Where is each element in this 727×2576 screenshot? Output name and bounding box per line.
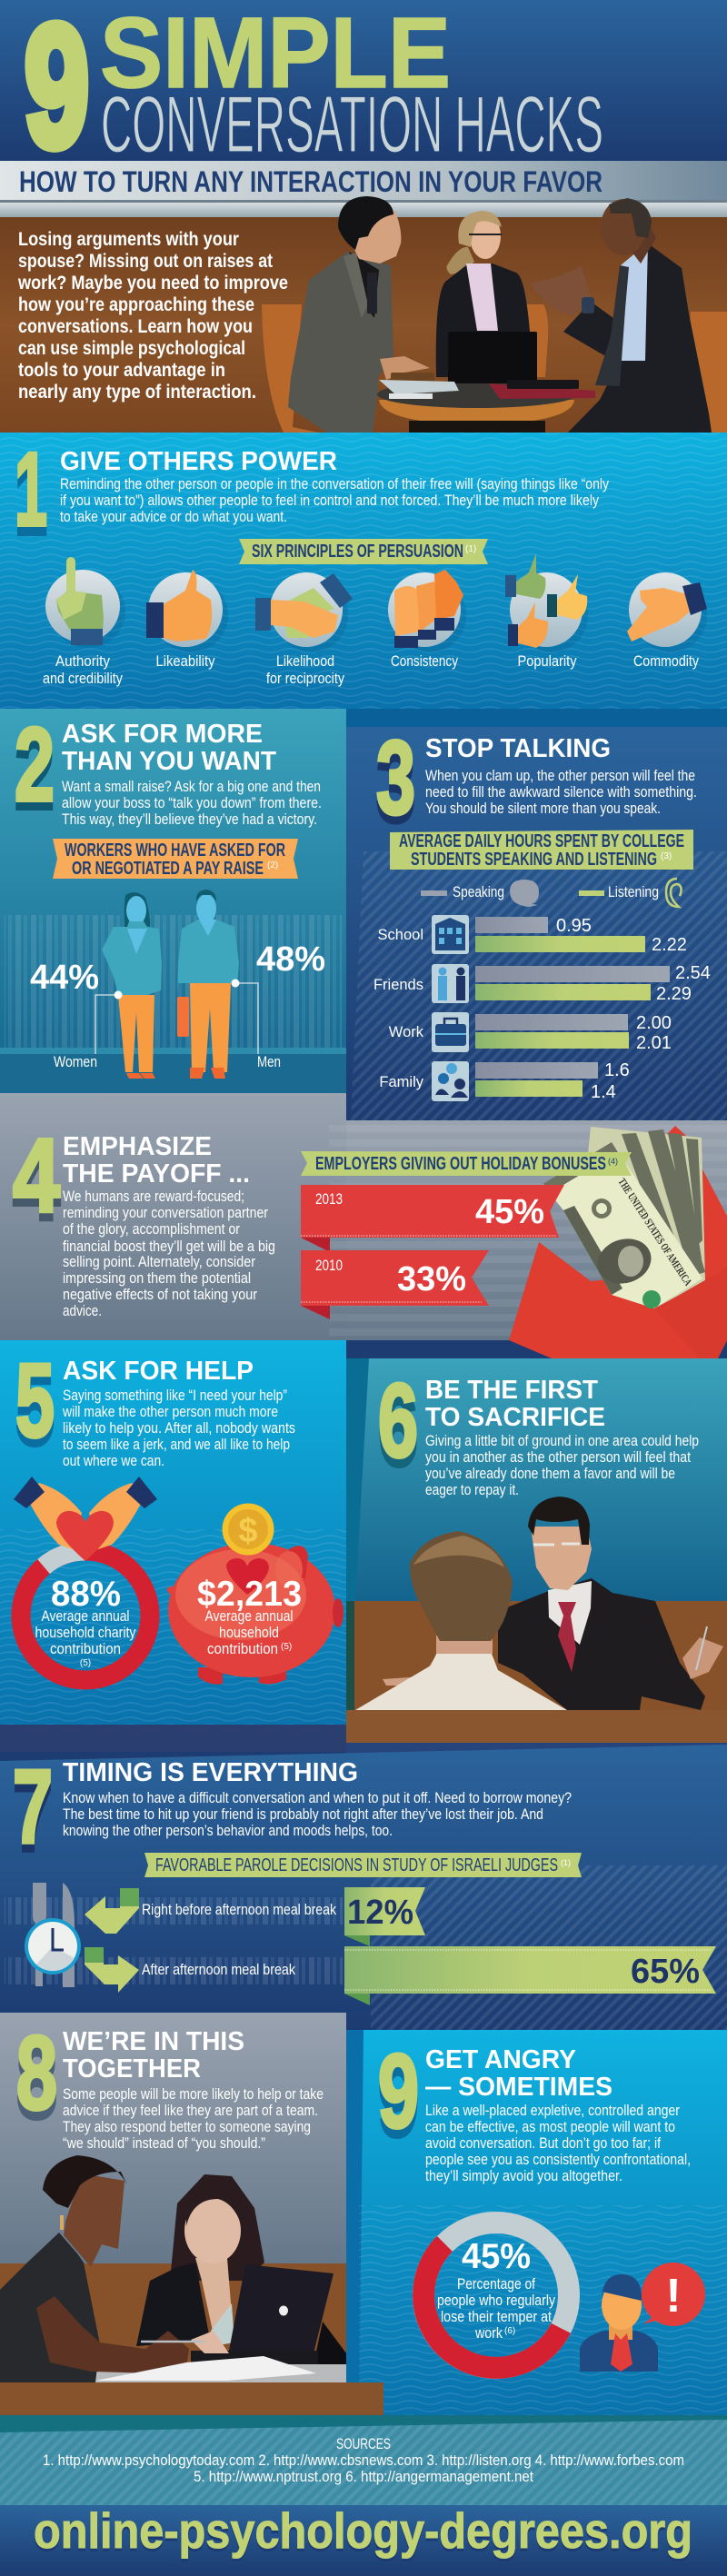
- body: advice.: [63, 1303, 102, 1319]
- subtitle band: [0, 161, 727, 217]
- panel: 6 be the first to sacrifice: TO SACRIFICE: [425, 1403, 605, 1432]
- chart: charity ring: contribution: [50, 1641, 121, 1657]
- body: you in another as the other person will feel that: [425, 1449, 691, 1466]
- body: [62, 779, 322, 828]
- body: likely to help you. After all, nobody wants: [63, 1420, 295, 1437]
- banner: parole decisions: FAVORABLE PAROLE DECISIONS IN STUDY OF ISRAELI JUDGES: [155, 1855, 558, 1875]
- ribbon: 65%: [344, 1946, 716, 2005]
- row: work: Work: [389, 1024, 424, 1040]
- row: work: 2.01: [636, 1033, 672, 1053]
- chart: piggy bank: (5): [281, 1642, 292, 1652]
- intro text: conversations. Learn how you: [18, 316, 253, 337]
- body: [63, 1189, 275, 1319]
- icon: likelihood for reciprocity: [255, 572, 353, 652]
- intro text: can use simple psychological: [18, 338, 245, 359]
- chart: temper ring: 45%: [462, 2237, 531, 2276]
- chairs: [262, 304, 318, 433]
- numeral 5: 5: [15, 1343, 55, 1459]
- ribbon: 2013 45%: 2013: [315, 1190, 343, 1208]
- icon: coin: [222, 1503, 274, 1556]
- body: Saying something like “I need your help”: [63, 1387, 287, 1404]
- chart: temper ring: [423, 2223, 569, 2368]
- labels: Women: [54, 1054, 97, 1070]
- icon: hands with heart: [14, 1477, 157, 1561]
- row: friends: 2.29: [656, 984, 692, 1004]
- legend: [421, 879, 682, 907]
- row: family: 1.4: [591, 1082, 616, 1102]
- body: reminding your conversation partner: [63, 1205, 268, 1221]
- chart: charity ring: household charity: [35, 1625, 136, 1641]
- banner: holiday bonuses: [301, 1151, 632, 1176]
- chart: charity ring: [14, 1477, 157, 1680]
- ribbon: 2013 45%: [301, 1185, 564, 1252]
- arrow: before break: [85, 1888, 139, 1934]
- panel: 5 ask for help: [0, 1340, 346, 1725]
- body: [425, 768, 697, 817]
- panel: 4 emphasize the payoff: THE PAYOFF ...: [63, 1159, 250, 1189]
- panel: 3 stop talking content: [373, 720, 711, 1102]
- stat: women 44%: 44%: [30, 959, 99, 997]
- legend: Listening: [608, 884, 659, 900]
- body: You should be silent more than you speak.: [425, 801, 661, 817]
- body: of the glory, accomplishment or: [63, 1221, 240, 1238]
- intro text: tools to your advantage in: [18, 360, 225, 381]
- row: family: 1.6: [604, 1060, 630, 1080]
- photo: two women with a laptop: [0, 2155, 368, 2382]
- body: “we should” instead of “you should.”: [63, 2135, 265, 2152]
- ribbon: 2010 33%: 33%: [397, 1260, 466, 1298]
- intro panel: [0, 196, 727, 433]
- envelope and money: THE UNITED STATES OF AMERICA: [615, 1176, 695, 1288]
- body: They also respond better to someone saying: [63, 2119, 311, 2135]
- banner: six principles: SIX PRINCIPLES OF PERSUASION: [252, 542, 463, 562]
- body: people see you as consistently confrontational,: [425, 2152, 691, 2168]
- labels: Right before afternoon meal break: [142, 1902, 337, 1918]
- subtitle: HOW TO TURN ANY INTERACTION IN YOUR FAVOR: [19, 165, 603, 198]
- body: avoid conversation. But don’t go too far; if: [425, 2135, 661, 2152]
- wood desk: [346, 1710, 727, 1743]
- heading: ASK FOR HELP: [63, 1357, 254, 1386]
- body: to seem like a jerk, and we all like to help: [63, 1437, 290, 1453]
- panel: sources: 5. http://www.nptrust.org 6. http://angermanagement.net: [194, 2469, 533, 2485]
- icon: ear: [666, 879, 682, 907]
- body: [60, 476, 610, 525]
- numeral 9: 9: [378, 2034, 419, 2150]
- row: family: Family: [379, 1074, 424, 1090]
- row: friends: 2.54: [675, 963, 711, 983]
- heading: BE THE FIRST: [425, 1376, 598, 1405]
- panel: 7 timing is everything: After afternoon meal break: [142, 1962, 296, 1978]
- panel: 2 ask for more: Men: [257, 1054, 281, 1070]
- banner: holiday bonuses: EMPLOYERS GIVING OUT HOLIDAY BONUSES: [315, 1154, 606, 1174]
- man left: [288, 252, 393, 433]
- row: school: 2.22: [652, 935, 687, 955]
- panel: 9 get angry sometimes: [346, 2030, 727, 2415]
- labels: Commodity: [633, 653, 700, 670]
- stat: men 48%: 48%: [256, 940, 325, 979]
- banner: workers: OR NEGOTIATED A PAY RAISE: [72, 859, 264, 879]
- man right: [563, 244, 712, 433]
- banner: daily hours: [390, 830, 693, 870]
- body: [62, 1387, 295, 1469]
- arrow: after break: [85, 1947, 139, 1993]
- labels: and credibility: [43, 671, 124, 687]
- panel: sources: SOURCES: [336, 2436, 391, 2452]
- row: school: 0.95: [556, 916, 592, 936]
- body: Know when to have a difficult conversation and when to put it off. Need to borrow money?: [63, 1790, 572, 1806]
- title word SIMPLE: SIMPLE: [100, 0, 451, 109]
- panel: 9 get angry sometimes: — SOMETIMES: [425, 2073, 612, 2102]
- figure: man: [177, 890, 239, 1079]
- panel: 3 stop talking background strip: [346, 709, 727, 1120]
- header: [0, 0, 727, 183]
- labels: [43, 653, 700, 687]
- chart: charity ring: (5): [80, 1658, 91, 1668]
- notebook: [95, 2356, 316, 2381]
- icon: authority: [45, 557, 125, 648]
- icon: commodity: [627, 572, 707, 652]
- chart: piggy bank: contribution: [207, 1641, 278, 1657]
- body: Some people will be more likely to help or take: [63, 2086, 324, 2103]
- banner: holiday bonuses: (4): [608, 1157, 618, 1166]
- right-hand woman: [171, 2174, 264, 2281]
- body: eager to repay it.: [425, 1482, 519, 1498]
- photo: three business people at a table: [262, 196, 727, 433]
- banner: workers: [53, 839, 298, 879]
- intro text: Losing arguments with your: [18, 229, 239, 250]
- icon: exclamation bubble: !: [665, 2270, 682, 2322]
- heading: EMPHASIZE: [63, 1132, 212, 1161]
- legend: Speaking: [453, 884, 504, 900]
- icon: coin: $: [238, 1512, 258, 1550]
- body: out where we can.: [63, 1453, 164, 1469]
- body: [425, 2103, 691, 2184]
- body: impressing on them the potential: [63, 1270, 251, 1287]
- heading: STOP TALKING: [425, 734, 611, 763]
- labels: for reciprocity: [266, 671, 345, 687]
- icon: popularity: [505, 553, 588, 652]
- body: will make the other person much more: [62, 1404, 278, 1420]
- icon: angry man: [580, 2263, 705, 2372]
- body: The best time to hit up your friend is probably not right after they’ve lost their job. And: [63, 1806, 543, 1823]
- chart: temper ring: work: [474, 2325, 503, 2342]
- ribbon: 12%: [344, 1887, 425, 1946]
- labels: Popularity: [518, 653, 577, 670]
- banner: workers: (2): [267, 860, 278, 870]
- numeral 6: 6: [378, 1363, 418, 1479]
- panel: 2 ask for more: THAN YOU WANT: [62, 747, 276, 776]
- body: We humans are reward-focused;: [63, 1189, 244, 1205]
- panel: 4 emphasize the payoff: [0, 1093, 727, 1358]
- ribbon: 12%: 12%: [347, 1894, 413, 1932]
- body: if you want to”) allows other people to feel in control and not forced. They’ll be much more likely: [60, 492, 600, 509]
- numeral 7: 7: [13, 1749, 53, 1865]
- banner: daily hours: (3): [661, 851, 672, 861]
- laptop: [448, 332, 537, 383]
- chart: charity ring: 88%: [51, 1575, 121, 1614]
- body: you’ve already done them a favor and will be: [425, 1466, 675, 1482]
- photo: two men talking: [355, 1497, 723, 1710]
- labels: Likeability: [156, 653, 215, 670]
- hand and books: [380, 356, 430, 380]
- row: school: [378, 915, 687, 955]
- chart: temper ring: lose their temper at: [441, 2309, 552, 2325]
- icon: consistency: [388, 570, 466, 652]
- table: [91, 2364, 368, 2382]
- panel: 2 ask for more: [0, 707, 346, 1093]
- body: they’ll simply avoid you altogether.: [425, 2168, 622, 2184]
- row: school: School: [378, 927, 423, 943]
- ribbon: 65%: 65%: [631, 1953, 700, 1991]
- icon: speech bubble: [510, 880, 539, 907]
- row: friends: [373, 963, 711, 1004]
- chart: temper ring: people who regularly: [437, 2293, 556, 2309]
- banner: workers: WORKERS WHO HAVE ASKED FOR: [65, 840, 285, 860]
- woman: [447, 247, 474, 274]
- row: family: [379, 1060, 630, 1102]
- body: [63, 2086, 324, 2152]
- left-hand woman: [64, 2173, 124, 2267]
- icon: likeability: [146, 570, 228, 652]
- panel: 8 we're in this together: [0, 2013, 368, 2382]
- body: selling point. Alternately, consider: [63, 1254, 255, 1270]
- panel: 8 we're in this together: TOGETHER: [63, 2054, 201, 2084]
- body: [425, 1433, 699, 1498]
- labels: Likelihood: [276, 653, 334, 670]
- chart: temper ring: (6): [504, 2326, 515, 2336]
- intro text: work? Maybe you need to improve: [17, 273, 288, 293]
- ribbon: 2010 33%: [301, 1250, 489, 1319]
- envelope and money: [509, 1126, 727, 1358]
- panel: 6 be the first to sacrifice: [346, 1358, 727, 1743]
- labels: Consistency: [391, 653, 459, 670]
- heading: ASK FOR MORE: [62, 720, 263, 749]
- banner: six principles: [239, 539, 488, 564]
- body: Want a small raise? Ask for a big one and then: [62, 779, 321, 795]
- intro text: [17, 229, 288, 403]
- row: work: 2.00: [636, 1013, 672, 1033]
- numeral 2: 2: [15, 707, 55, 823]
- panel: 7 timing is everything: [0, 1725, 727, 2030]
- body: advice if they feel like they are part of a team.: [63, 2103, 318, 2119]
- ribbon: 2010 33%: 2010: [315, 1257, 343, 1274]
- body: financial boost they’ll get will be a big: [63, 1238, 275, 1255]
- body: knowing the other person’s behavior and moods helps, too.: [63, 1823, 393, 1839]
- heading: TIMING IS EVERYTHING: [63, 1758, 358, 1787]
- body: Like a well-placed expletive, controlled anger: [425, 2103, 680, 2119]
- heading: GET ANGRY: [425, 2045, 576, 2074]
- row: friends: Friends: [373, 977, 423, 993]
- banner: parole decisions: [144, 1853, 582, 1877]
- callout lines: [95, 983, 258, 1054]
- body: Reminding the other person or people in the conversation of their free will (saying things like “only: [60, 476, 610, 492]
- numeral 3: 3: [376, 720, 415, 836]
- chart: piggy bank: household: [219, 1625, 279, 1641]
- intro text: spouse? Missing out on raises at: [18, 251, 273, 272]
- table: [379, 400, 574, 425]
- labels: Authority: [55, 653, 111, 670]
- body: to take your advice or do what you want.: [60, 509, 287, 525]
- body: negative effects of not taking your: [63, 1287, 257, 1303]
- numeral 4: 4: [13, 1118, 60, 1234]
- figure: woman: [102, 892, 162, 1079]
- heading: GIVE OTHERS POWER: [60, 447, 337, 476]
- chart: piggy bank: [167, 1503, 344, 1685]
- numeral 8: 8: [16, 2015, 57, 2132]
- chart: charity ring: Average annual: [42, 1608, 129, 1625]
- banner: parole decisions: (1): [561, 1858, 571, 1867]
- chart: piggy bank: Average annual: [205, 1608, 293, 1625]
- ribbon: 2013 45%: 45%: [475, 1193, 544, 1231]
- row: work: [389, 1012, 672, 1053]
- panel: 1 give others power: [0, 432, 727, 709]
- wood table front: [0, 2382, 383, 2415]
- panel: sources: [0, 2415, 727, 2505]
- chart: temper ring: Percentage of: [457, 2276, 535, 2293]
- body: can be effective, as most people will want to: [425, 2119, 675, 2135]
- laptop: [229, 2264, 334, 2353]
- numeral 1: 1: [15, 432, 47, 548]
- chart: piggy bank: $2,213: [197, 1575, 302, 1614]
- footer: [0, 2502, 727, 2576]
- heading: WE’RE IN THIS: [63, 2027, 244, 2056]
- icon: fork knife clock: [25, 1883, 81, 1987]
- intro text: nearly any type of interaction.: [18, 382, 256, 403]
- banner: six principles: (1): [465, 544, 476, 554]
- body: allow your boss to “talk you down” from there.: [62, 795, 322, 811]
- body: This way, they’ll believe they’ve had a victory.: [62, 811, 317, 828]
- intro text: how you’re approaching these: [18, 294, 254, 315]
- body: [63, 1790, 572, 1839]
